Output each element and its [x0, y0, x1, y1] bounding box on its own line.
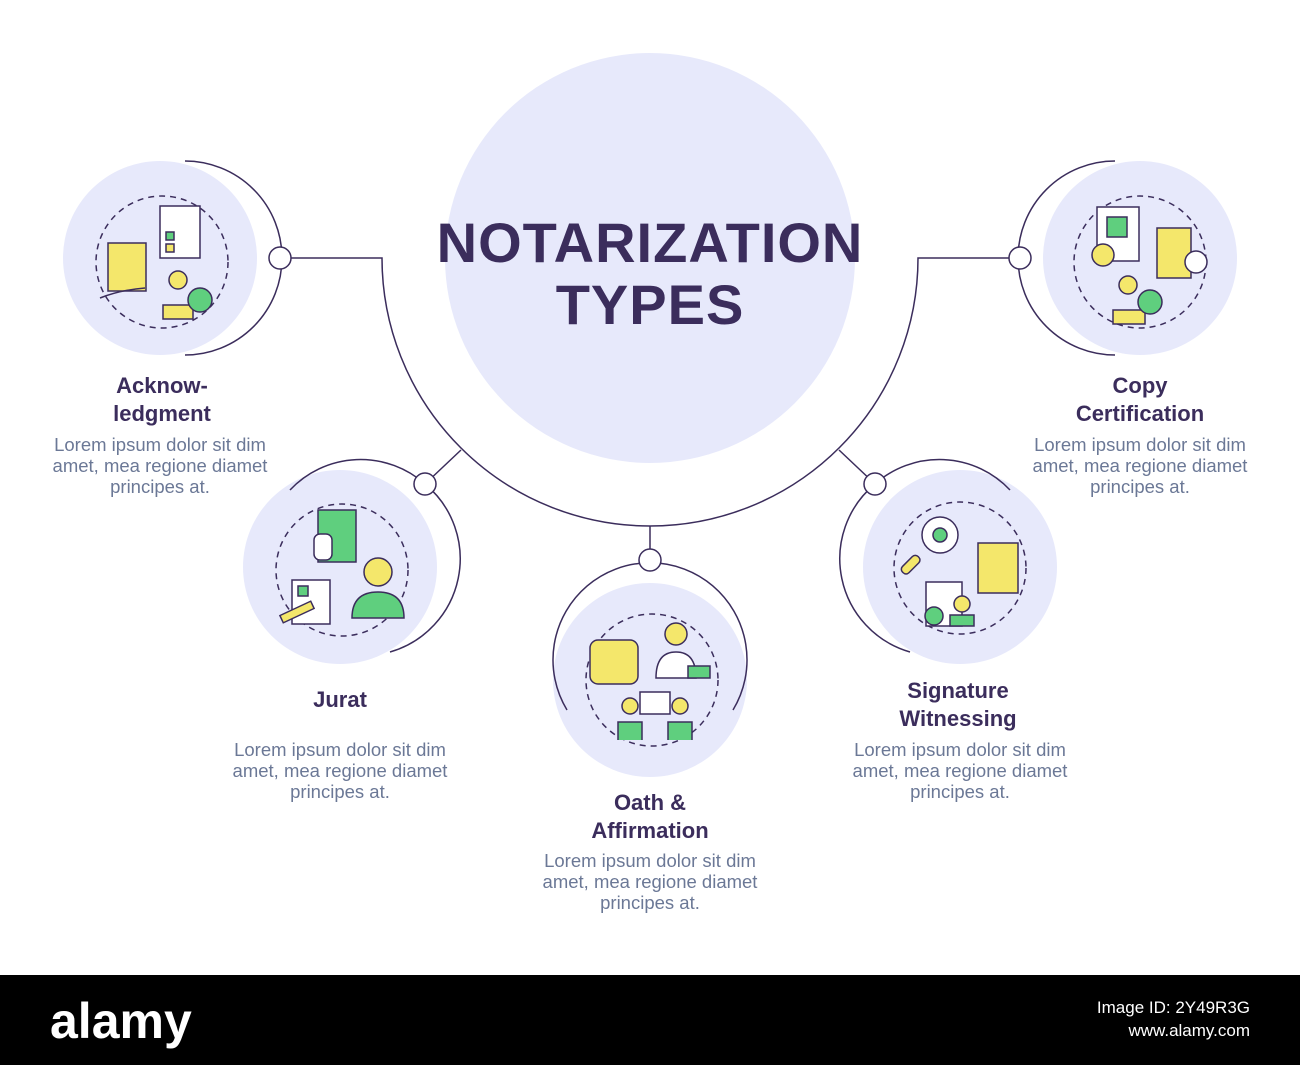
icon: acknowledgment [96, 196, 228, 328]
item: Oath & Affirmation: Affirmation [591, 818, 709, 843]
label: Jurat [313, 687, 368, 712]
item: Oath & Affirmation [543, 549, 757, 913]
footer bar: Image ID: 2Y49R3G [1097, 998, 1250, 1017]
description: amet, mea regione diamet [53, 455, 267, 476]
description: principes at. [600, 892, 700, 913]
footer bar [0, 975, 1300, 1065]
item: Acknowledgment: ledgment [113, 401, 212, 426]
description: principes at. [1090, 476, 1190, 497]
description: principes at. [910, 781, 1010, 802]
description: Lorem ipsum dolor sit dim [854, 739, 1066, 760]
description: Lorem ipsum dolor sit dim [544, 850, 756, 871]
item: Copy Certification: Certification [1076, 401, 1204, 426]
item: Copy Certification [1009, 161, 1247, 497]
description: amet, mea regione diamet [233, 760, 447, 781]
description: amet, mea regione diamet [543, 871, 757, 892]
label: Oath & [614, 790, 686, 815]
icon: jurat [276, 504, 408, 636]
description [1033, 434, 1247, 497]
item: Signature Witnessing: Witnessing [899, 706, 1017, 731]
item: Signature Witnessing [840, 460, 1067, 802]
icon: oath [586, 614, 718, 746]
icon: copy certification [1074, 196, 1207, 328]
description: Lorem ipsum dolor sit dim [54, 434, 266, 455]
connector arc [291, 258, 1009, 549]
label: Copy [1112, 373, 1168, 398]
description [543, 850, 757, 913]
description: principes at. [110, 476, 210, 497]
description [853, 739, 1067, 802]
footer bar: alamy [50, 993, 192, 1049]
title: NOTARIZATION [437, 211, 863, 274]
label: Signature [907, 678, 1009, 703]
description: amet, mea regione diamet [1033, 455, 1247, 476]
footer bar: www.alamy.com [1127, 1021, 1250, 1040]
icon: signature witnessing [894, 502, 1026, 634]
title: TYPES [556, 273, 744, 336]
description: Lorem ipsum dolor sit dim [234, 739, 446, 760]
description: principes at. [290, 781, 390, 802]
description: Lorem ipsum dolor sit dim [1034, 434, 1246, 455]
description [233, 739, 447, 802]
label: Acknow- [116, 373, 208, 398]
description: amet, mea regione diamet [853, 760, 1067, 781]
item: Acknowledgment [53, 161, 291, 497]
item: Jurat [233, 460, 460, 802]
center circle [445, 53, 855, 463]
description [53, 434, 267, 497]
title [437, 211, 863, 336]
